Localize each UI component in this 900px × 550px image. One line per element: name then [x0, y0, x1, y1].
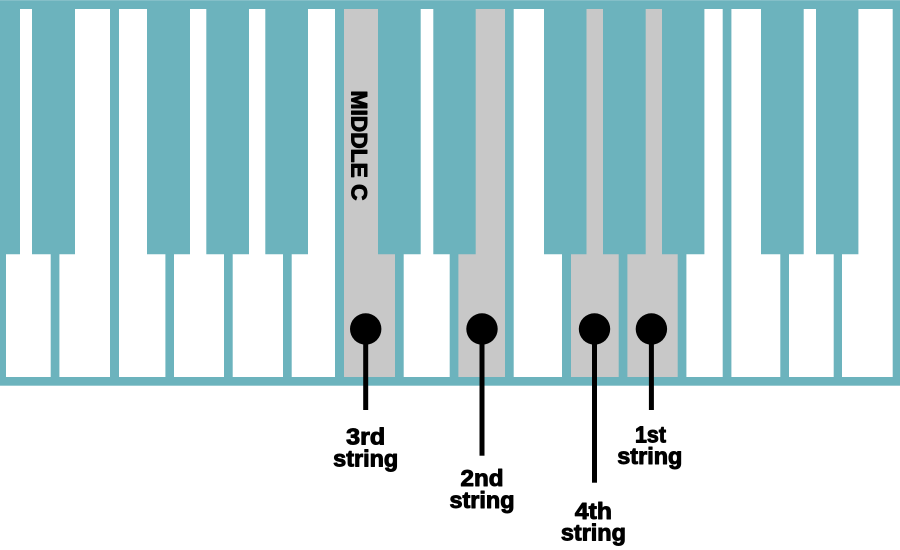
marker: 1st string: [636, 313, 667, 410]
middle C label: MIDDLE C: [346, 91, 372, 201]
marker: 3rd string: [350, 313, 381, 410]
label: 1st string: [617, 422, 682, 469]
label: 3rd string: string: [333, 446, 398, 472]
highlighted key: 2nd string: [458, 9, 505, 377]
label: 1st string: string: [617, 443, 682, 469]
label: 3rd string: 3rd: [346, 423, 385, 449]
label: 4th string: [561, 498, 626, 546]
label: 2nd string: 2nd: [460, 465, 504, 491]
highlighted key: 4th string: [571, 9, 619, 377]
white keys: [6, 9, 893, 377]
marker: 4th string: [579, 313, 610, 483]
marker: 2nd string: [466, 313, 498, 456]
keyboard panel: [0, 0, 900, 386]
label: 3rd string: [333, 423, 398, 472]
highlighted key: 1st string: [627, 9, 678, 377]
label: 2nd string: [450, 465, 514, 513]
label: 1st string: 1st: [635, 422, 666, 448]
highlighted key: middle C, 3rd string: [344, 9, 395, 377]
label: 4th string: 4th: [575, 498, 612, 524]
label: 2nd string: string: [450, 487, 514, 513]
label: 4th string: string: [561, 520, 626, 546]
